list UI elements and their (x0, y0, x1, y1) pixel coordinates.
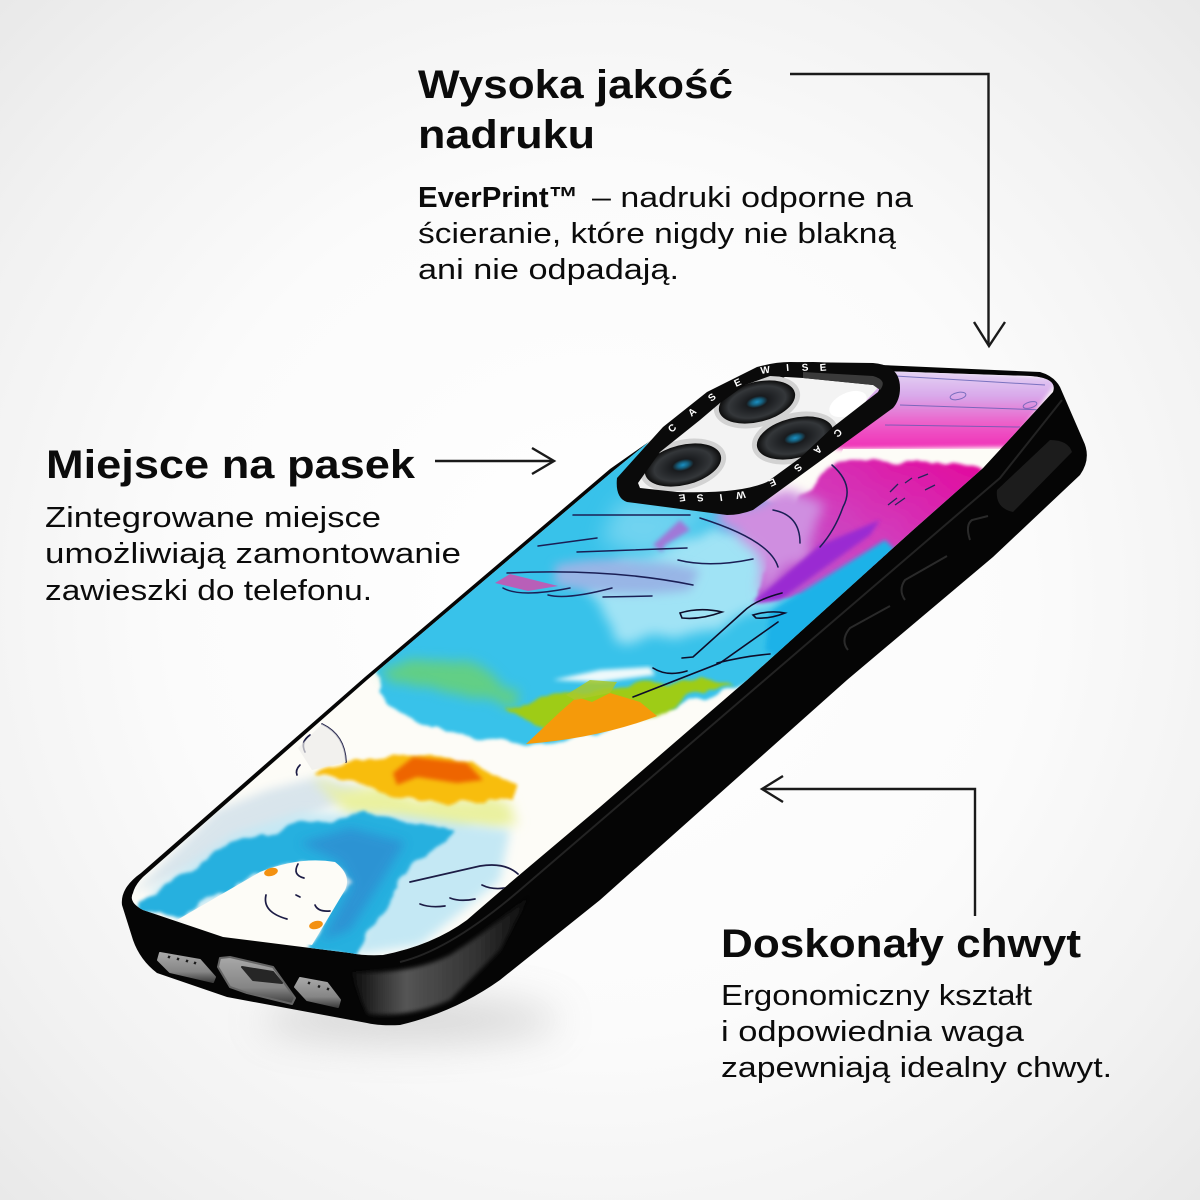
heading: Miejsce na pasek (46, 443, 416, 487)
artwork base (132, 371, 1054, 956)
case body (122, 362, 1087, 1025)
violet purple spot (653, 520, 690, 552)
white band (838, 449, 1005, 470)
camera plate (625, 372, 885, 500)
bump frame (617, 362, 900, 515)
wing tint (298, 724, 346, 770)
lens ring right (746, 403, 844, 473)
lens left (640, 436, 726, 494)
camera bump (617, 362, 900, 515)
callout: strap slot: umożliwiają zamontowanie (45, 538, 461, 570)
lower arc blue (140, 813, 453, 958)
lower arc orange core (393, 757, 483, 785)
magenta watercolor (755, 460, 995, 605)
lime wash (505, 677, 732, 735)
bottom speaker right (295, 978, 340, 1007)
callout: grip (721, 922, 1112, 1084)
body text: Ergonomiczny kształt (721, 980, 1032, 1012)
bottom speaker left (158, 953, 215, 982)
face details (265, 724, 518, 919)
periwinkle wash (555, 559, 700, 594)
side buttons (844, 516, 988, 650)
case corner sheen (352, 895, 530, 1015)
lower arc yellow orange (313, 755, 513, 803)
cool wash upper (600, 500, 720, 560)
lower arc pale yellow (315, 782, 518, 835)
pale streak (553, 667, 655, 682)
lower arc pale grey (133, 777, 370, 893)
callout: print quality: nadruku (418, 113, 595, 157)
top faint lines and marks (885, 376, 1045, 427)
callout: print quality: – nadruki odporne na (592, 182, 914, 214)
callout: grip: i odpowiednia waga (721, 1016, 1025, 1048)
body text: Zintegrowane miejsce (45, 502, 381, 534)
phone case (100, 350, 1100, 1025)
lens top (714, 373, 800, 431)
pink dashes (888, 474, 935, 505)
tree (566, 680, 617, 700)
arrow: strap slot (435, 448, 554, 474)
callout: print quality: ścieranie, które nigdy nie blakną (418, 218, 897, 250)
bottom charging port (218, 957, 295, 1004)
lens right (752, 409, 838, 467)
violet streak (753, 520, 880, 602)
body text: EverPrint™ (418, 182, 578, 214)
lower arc pale blue (150, 813, 510, 955)
heading: Doskonały chwyt (721, 922, 1081, 966)
back face artwork (132, 371, 1054, 956)
brand text top: CASEWISE (666, 362, 827, 435)
phone shadow (260, 998, 560, 1042)
deep blue patch (765, 540, 905, 665)
callout: strap slot (45, 443, 461, 607)
lower arc deep blue (300, 828, 405, 940)
arrow: grip (762, 776, 975, 916)
line drawing (503, 465, 847, 597)
orange watercolor (526, 693, 657, 744)
callout: print quality (418, 63, 914, 286)
pink smear (495, 574, 558, 591)
side dark button (997, 440, 1072, 512)
lens ring left (634, 430, 732, 500)
face white (177, 860, 347, 945)
green wash (385, 660, 515, 706)
arrow: print quality (790, 74, 1005, 346)
heading: Wysoka jakość (418, 63, 733, 107)
pale purple wash (720, 490, 825, 600)
brand text bottom: CASEWISE (678, 426, 844, 503)
blue watercolor (370, 440, 900, 745)
pale blue wash (590, 530, 790, 640)
flash (825, 386, 871, 422)
face ink lines (633, 593, 785, 697)
lens ring top (708, 367, 806, 437)
callout: grip: zapewniają idealny chwyt. (721, 1052, 1112, 1084)
callout: strap slot: zawieszki do telefonu. (45, 575, 372, 607)
lilac and pink watercolor top (835, 368, 1060, 449)
bump inner slope (803, 372, 883, 390)
side ridge (400, 400, 1062, 962)
cheeks (264, 868, 278, 876)
callout: print quality: ani nie odpadają. (418, 254, 679, 286)
